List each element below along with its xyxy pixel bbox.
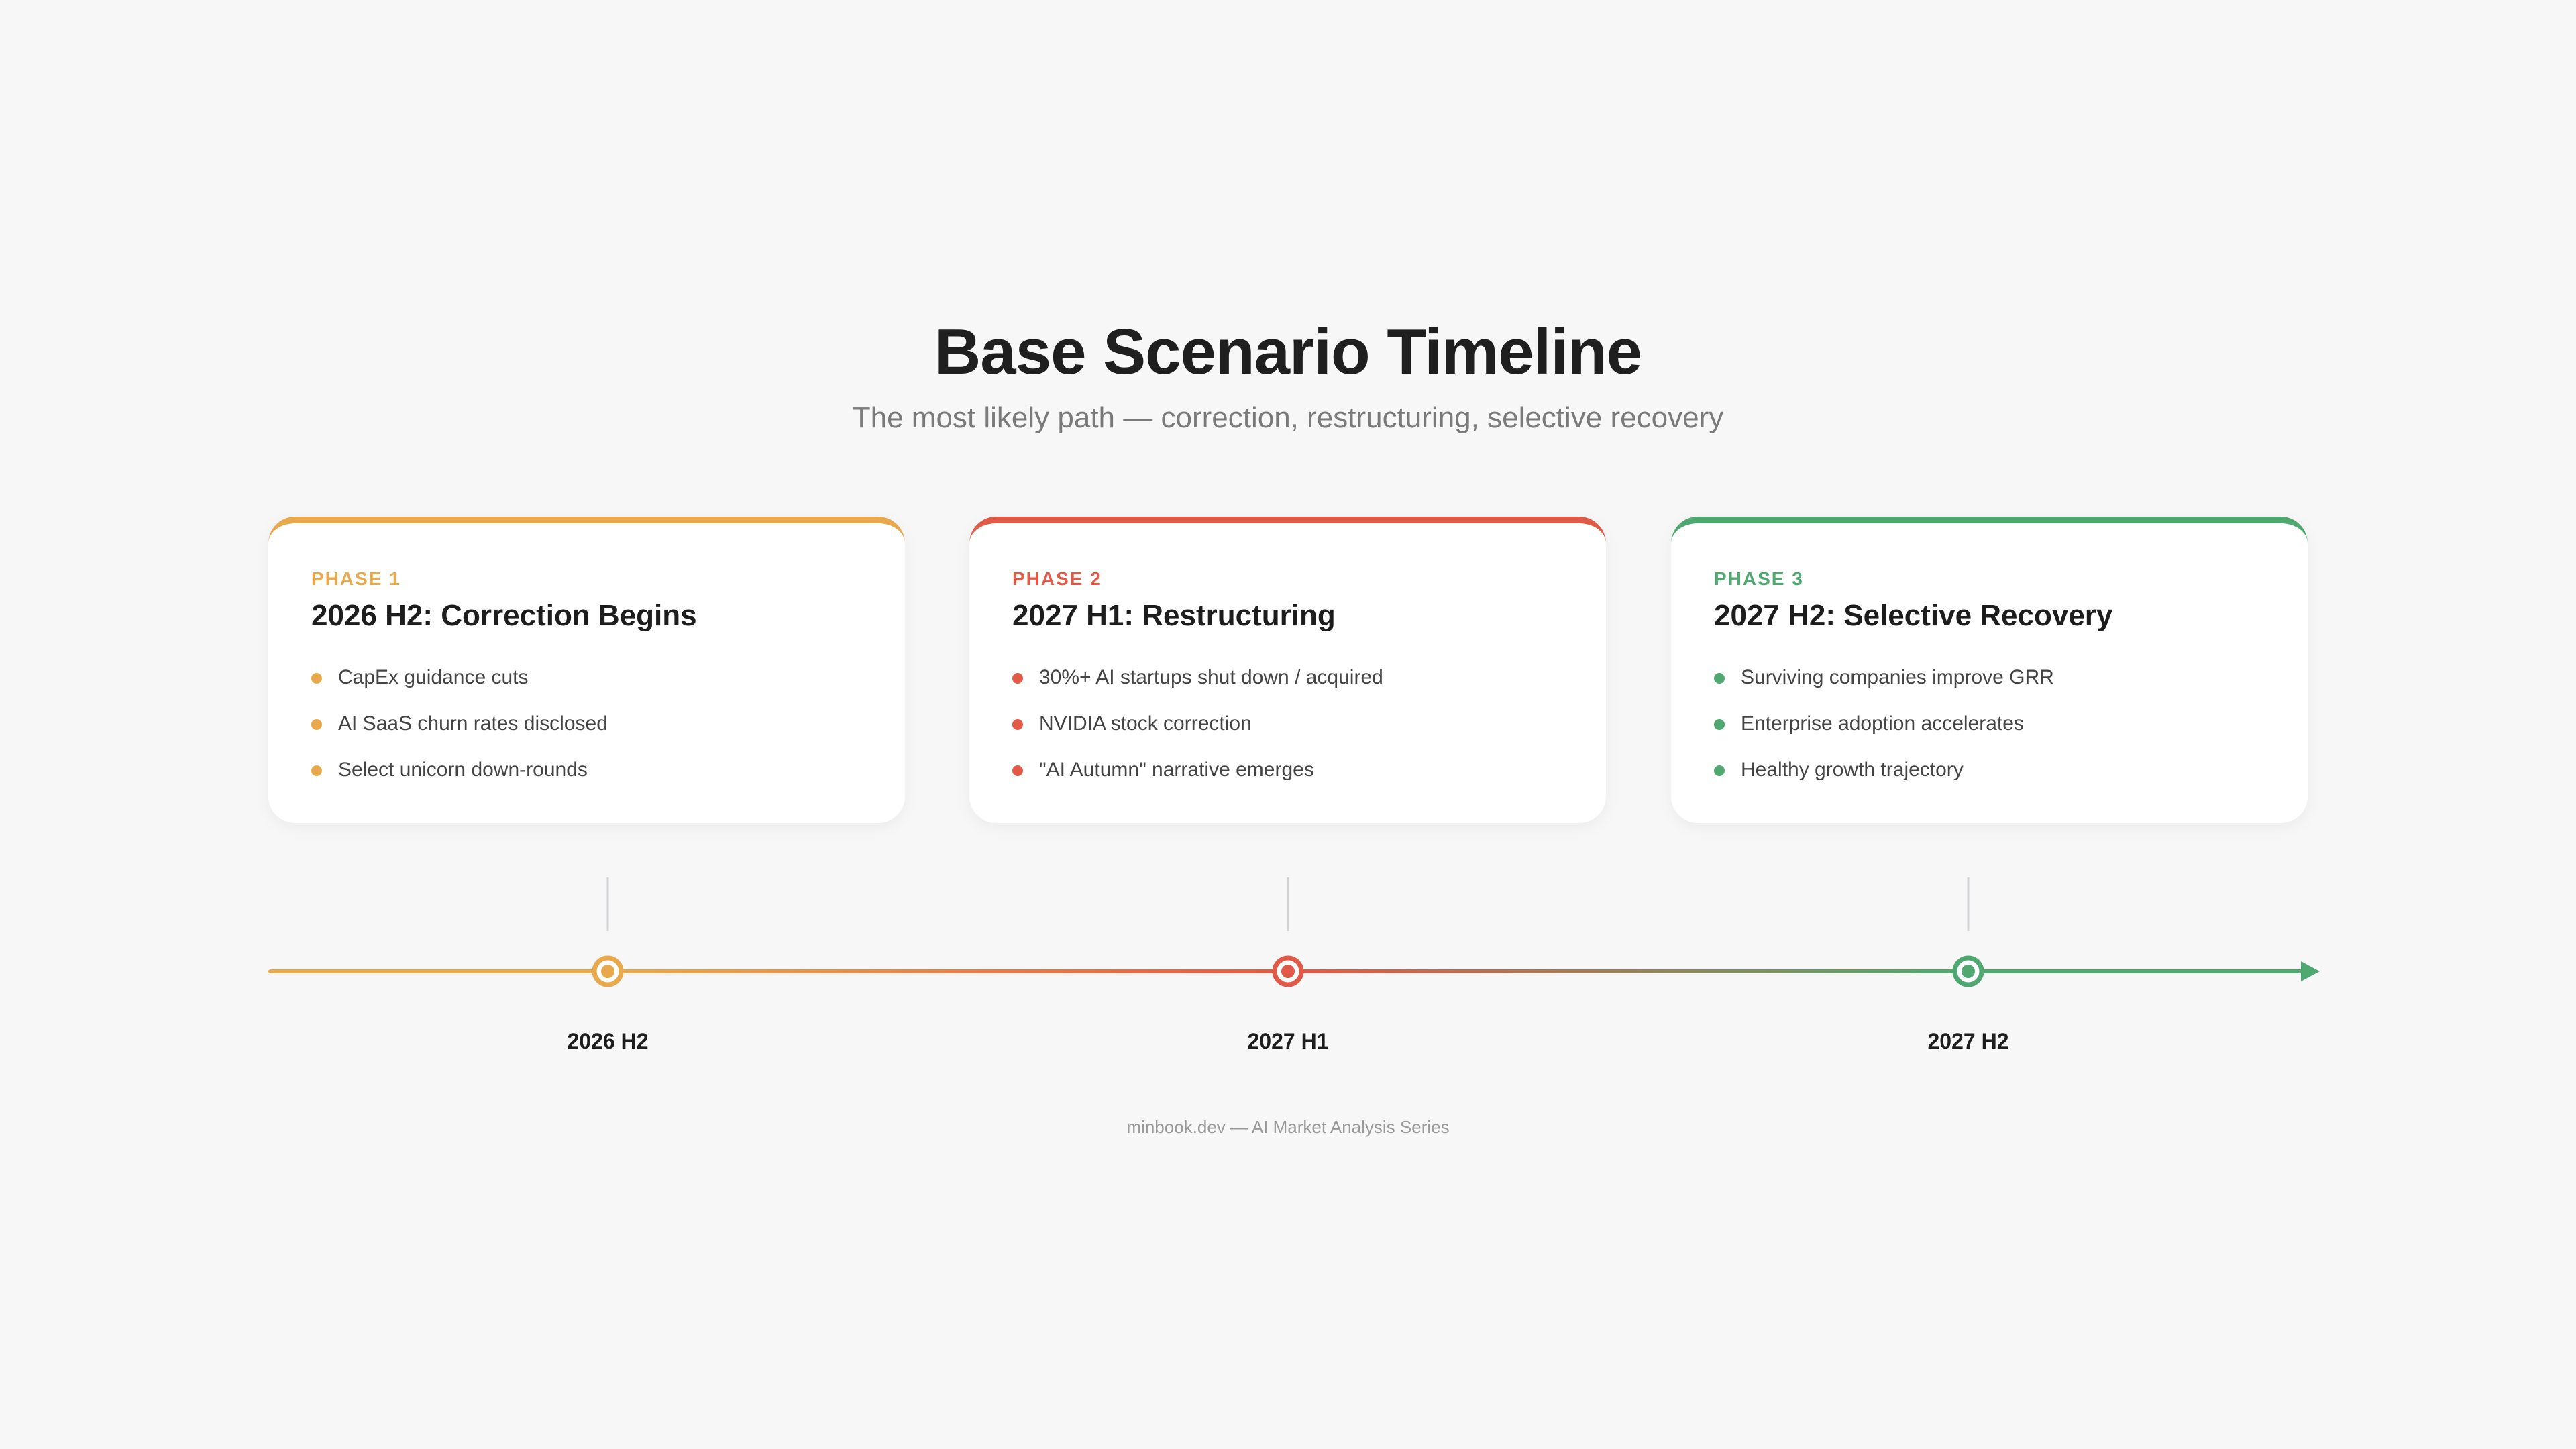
label 2027 H2: 2027 H2 <box>1928 1029 2008 1053</box>
bullet list: Enterprise adoption accelerates <box>1741 712 2024 735</box>
panel: phase 1 <box>268 517 905 823</box>
node 3 <box>1955 958 1982 985</box>
panel: phase 2 <box>969 517 1606 823</box>
bullet list: AI SaaS churn rates disclosed <box>338 712 608 735</box>
timeline axis <box>270 969 2304 973</box>
panel: phase 3 <box>1671 517 2308 823</box>
phase label: PHASE 2 <box>1012 568 1102 589</box>
footer: minbook.dev — AI Market Analysis Series <box>1126 1117 1450 1137</box>
bullet list: NVIDIA stock correction <box>1039 712 1252 735</box>
bullet list: Healthy growth trajectory <box>1741 759 1964 781</box>
heading: 2027 H1: Restructuring <box>1012 599 1336 632</box>
label 2027 H1: 2027 H1 <box>1248 1029 1328 1053</box>
subtitle: The most likely path — correction, restructuring, selective recovery <box>853 401 1723 434</box>
bullet list <box>311 666 608 781</box>
bullet list: "AI Autumn" narrative emerges <box>1039 759 1314 781</box>
connector ticks <box>608 877 1968 931</box>
bullet list: Surviving companies improve GRR <box>1741 666 2054 688</box>
bullet list <box>1714 666 2054 781</box>
arrow head <box>2301 961 2320 981</box>
bullet list: CapEx guidance cuts <box>338 666 529 688</box>
bullet list: Select unicorn down-rounds <box>338 759 588 781</box>
node 1 <box>594 958 621 985</box>
phase label: PHASE 1 <box>311 568 401 589</box>
heading: 2026 H2: Correction Begins <box>311 599 697 632</box>
label 2026 H2: 2026 H2 <box>568 1029 648 1053</box>
phase label: PHASE 3 <box>1714 568 1804 589</box>
node 2 <box>1275 958 1301 985</box>
title: Base Scenario Timeline <box>934 316 1642 388</box>
heading: 2027 H2: Selective Recovery <box>1714 599 2112 632</box>
bullet list: 30%+ AI startups shut down / acquired <box>1039 666 1383 688</box>
bullet list <box>1012 666 1383 781</box>
